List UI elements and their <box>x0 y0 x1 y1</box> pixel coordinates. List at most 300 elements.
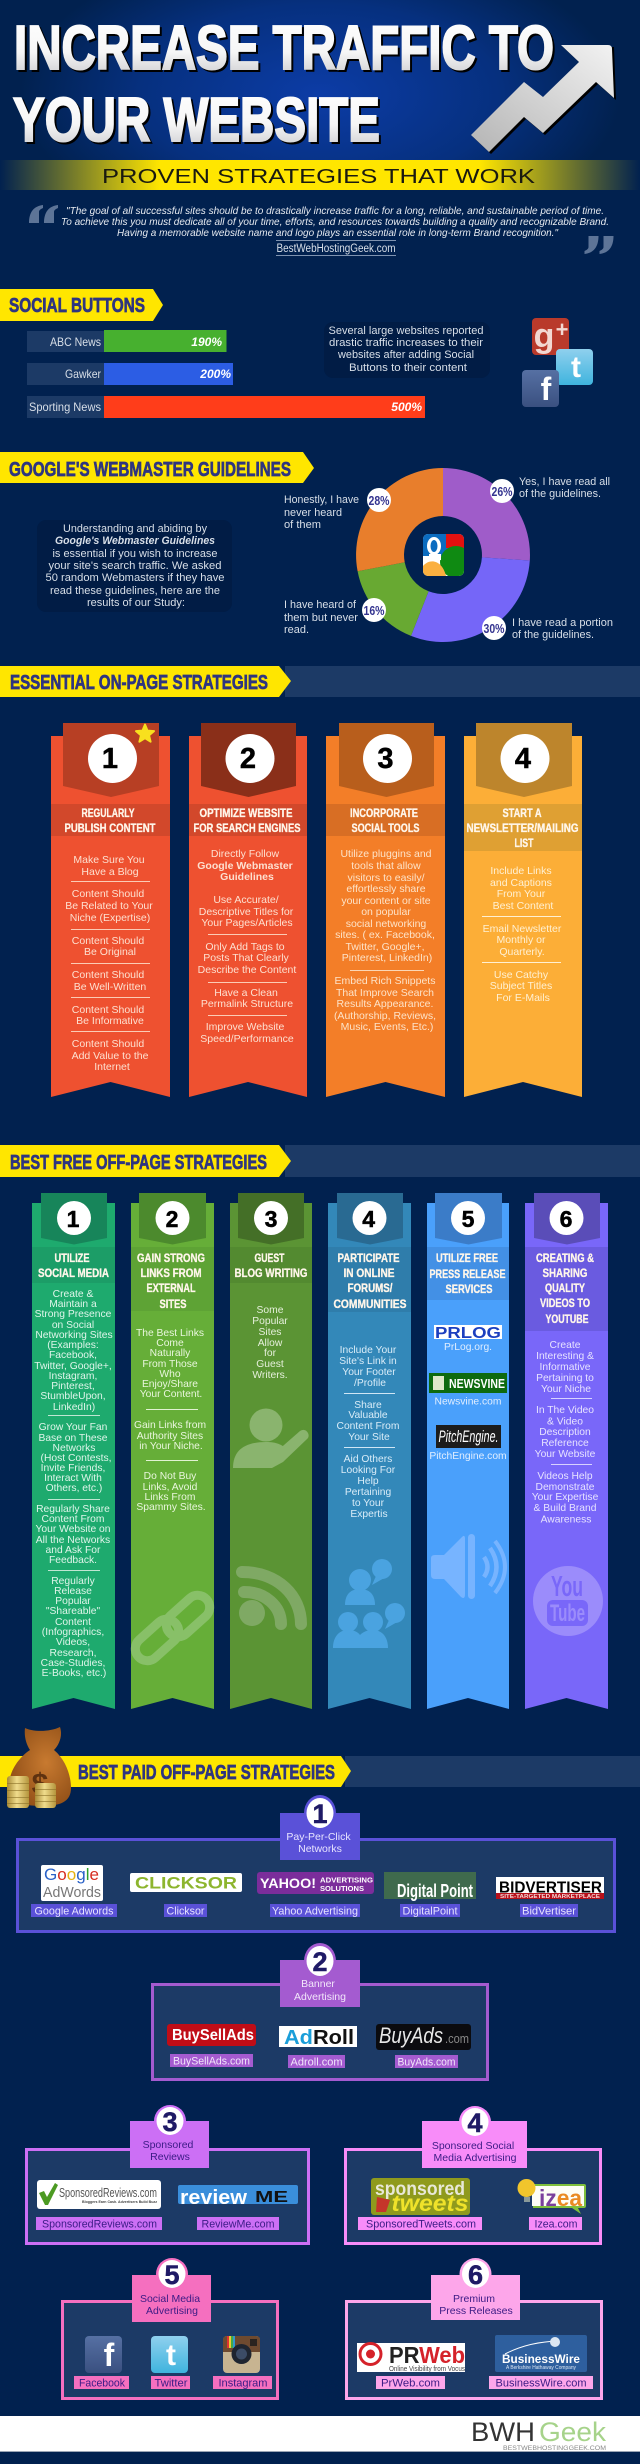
heading: best paid off-page strategies: BEST PAID OFF-PAGE STRATEGIES <box>78 1761 335 1784</box>
footer logo: Geek <box>539 2417 607 2447</box>
panel: on-page strategy 2: Describe the Content <box>198 964 296 976</box>
icon: closing quote mark <box>584 236 614 254</box>
panel: pay-per-click networks: 1 <box>312 1799 328 1829</box>
panel: on-page strategy 2: Speed/Performance <box>200 1033 294 1045</box>
panel: free strategy 2: Links, Avoid <box>143 1482 198 1493</box>
panel: sponsored reviews: 3 <box>162 2107 178 2137</box>
panel: free strategy 5: SERVICES <box>446 1282 492 1296</box>
panel: free strategy 1: Maintain a <box>49 1299 97 1310</box>
callout: guidelines intro: Google's Webmaster Guidelines <box>55 535 215 547</box>
panel: sponsored reviews: Sponsored <box>143 2139 194 2151</box>
quote source: BestWebHostingGeek.com <box>276 243 396 255</box>
bar chart: social buttons traffic: ABC News <box>50 335 101 349</box>
icon: person with pencil <box>233 1408 309 1468</box>
panel: on-page strategy 2: 2 <box>240 743 256 775</box>
panel: free strategy 1: Case-Studies, <box>41 1658 105 1669</box>
panel: free strategy 5 <box>427 1193 509 1709</box>
panel: free strategy 6: Interesting & <box>536 1351 594 1362</box>
panel: on-page strategy 1: Content Should <box>72 1038 144 1050</box>
panel: free strategy 6: YOUTUBE <box>546 1312 588 1326</box>
icon: google plus <box>532 317 569 355</box>
panel: free strategy 2: Links From <box>145 1492 195 1503</box>
subtitle bar: PROVEN STRATEGIES THAT WORK <box>102 165 535 188</box>
bubble: 26 percent: 26% <box>492 484 513 499</box>
panel: on-page strategy 1: Be Well-Written <box>74 981 146 993</box>
heading: essential on-page strategies <box>0 666 640 697</box>
icon: twitter <box>556 349 593 385</box>
icon: rising arrow <box>471 45 616 154</box>
panel: on-page strategy 3: (Authorship, Reviews, <box>334 1010 436 1022</box>
panel: sponsored social media advertising: SponsoredTweets.com <box>366 2218 476 2230</box>
panel: on-page strategy 4: Email Newsletter <box>483 923 562 935</box>
logo: reviewme <box>178 2185 298 2209</box>
panel: social media advertising: Facebook <box>79 2378 125 2390</box>
icon: chain link <box>130 1590 215 1666</box>
logo: izea: izea <box>539 2185 582 2211</box>
bubble: 26 percent <box>490 479 514 503</box>
logo: pitchengine: PitchEngine. <box>438 1427 498 1446</box>
panel: on-page strategy 1: Niche (Expertise) <box>70 912 150 924</box>
logo: adroll: AdRoll <box>284 2027 354 2049</box>
icon: instagram <box>223 2336 260 2373</box>
panel: on-page strategy 1: PUBLISH CONTENT <box>64 821 156 835</box>
panel: banner advertising: BuyAds.com <box>398 2056 456 2068</box>
callout: social buttons: Several large websites reported <box>328 325 484 337</box>
panel: free strategy 6: Your Expertise <box>532 1492 599 1503</box>
panel: free strategy 1: All the Networks <box>36 1535 110 1546</box>
panel: free strategy 1: SOCIAL MEDIA <box>38 1266 109 1280</box>
panel: free strategy 6: Description <box>539 1427 591 1438</box>
panel: free strategy 1: Regularly Share <box>36 1504 110 1515</box>
panel: free strategy 4: FORUMS/ <box>348 1281 393 1295</box>
panel: social media advertising: Advertising <box>146 2305 198 2317</box>
panel: free strategy 6: Pertaining to <box>536 1373 594 1384</box>
panel: free strategy 1: Content <box>55 1617 91 1628</box>
panel: on-page strategy 3: That Improve Search <box>336 987 434 999</box>
donut labels: Yes, I have read all <box>519 476 610 488</box>
panel: free strategy 1: 1 <box>67 1206 80 1232</box>
donut labels: Honestly, I have <box>284 494 359 506</box>
panel: free strategy 6 <box>525 1193 608 1709</box>
panel: free strategy 2: Spammy Sites. <box>136 1502 206 1513</box>
logo: google adwords: Google <box>44 1865 99 1884</box>
panel: on-page strategy 2: Use Accurate/ <box>213 894 279 906</box>
panel: free strategy 1: Pinterest, <box>51 1381 95 1392</box>
logo: google adwords: AdWords <box>43 1884 101 1901</box>
panel: free strategy 1: Content From <box>42 1514 104 1525</box>
panel: free strategy 4: Help <box>357 1476 379 1487</box>
panel: free strategy 1: (Examples: <box>47 1340 99 1351</box>
bar chart: social buttons traffic: Sporting News <box>29 400 101 414</box>
panel: free strategy 4: Content From <box>337 1421 399 1432</box>
panel: free strategy 6: VIDEOS TO <box>540 1296 590 1310</box>
panel: on-page strategy 3: social networking <box>346 918 426 930</box>
panel: free strategy 2: Who <box>159 1369 181 1380</box>
panel: on-page strategy 1 <box>51 723 170 1097</box>
icon: people talking <box>333 1559 405 1648</box>
panel: free strategy 3: Popular <box>252 1316 288 1327</box>
panel: on-page strategy 3: Music, Events, Etc.) <box>341 1021 433 1033</box>
panel: free strategy 3: BLOG WRITING <box>234 1266 308 1280</box>
icon: youtube: You <box>551 1571 583 1603</box>
title: YOUR WEBSITE <box>13 86 380 155</box>
panel: free strategy 6: Awareness <box>541 1514 591 1526</box>
panel: banner advertising <box>152 1943 488 2080</box>
bar chart: social buttons traffic: 200% <box>199 367 231 381</box>
panel: free strategy 2: Naturally <box>150 1348 191 1359</box>
bubble: 30 percent <box>482 616 506 640</box>
panel: on-page strategy 3: Pinterest, LinkedIn) <box>342 952 432 964</box>
logo: sponsored tweets <box>371 2178 470 2216</box>
heading: best free off-page strategies: BEST FREE OFF-PAGE STRATEGIES <box>10 1151 267 1174</box>
panel: on-page strategy 2: OPTIMIZE WEBSITE <box>200 806 292 820</box>
heading: essential on-page strategies: ESSENTIAL ON-PAGE STRATEGIES <box>10 671 268 694</box>
panel: on-page strategy 4: For E-Mails <box>496 992 550 1004</box>
panel: free strategy 4: IN ONLINE <box>344 1266 394 1280</box>
panel: banner advertising: Banner <box>301 1978 335 1990</box>
logo: izea <box>518 2179 586 2214</box>
bar chart: social buttons traffic: 500% <box>391 400 422 414</box>
quote text: "The goal of all successful sites should be to drastically increase traffic for a long, reliable, and sustainable period of time. <box>66 205 604 217</box>
panel: premium press releases: PrWeb.com <box>381 2378 440 2390</box>
panel: premium press releases: Press Releases <box>439 2305 513 2317</box>
panel: free strategy 1: Base on These <box>38 1433 108 1444</box>
title <box>13 14 556 157</box>
logo: pitchengine: PitchEngine.com <box>429 1451 507 1462</box>
panel: free strategy 2: in Your Niche. <box>139 1441 203 1452</box>
panel: free strategy 1 <box>32 1193 115 1709</box>
heading: social buttons: SOCIAL BUTTONS <box>9 294 145 317</box>
panel: on-page strategy 3: visitors to easily/ <box>347 872 425 884</box>
title: YOUR WEBSITE <box>15 88 382 157</box>
panel: free strategy 1: "Shareable" <box>46 1606 100 1617</box>
panel: premium press releases: BusinessWire.com <box>496 2378 586 2390</box>
panel: free strategy 6: Videos Help <box>537 1471 593 1482</box>
panel: on-page strategy 2: FOR SEARCH ENGINES <box>194 821 300 835</box>
bar chart: social buttons traffic: 190% <box>191 335 222 349</box>
panel: on-page strategy 4: 4 <box>515 743 531 775</box>
icon: twitter: t <box>166 2339 176 2372</box>
panel: free strategy 4 <box>328 1193 411 1709</box>
heading: best free off-page strategies <box>0 1145 640 1177</box>
panel: free strategy 6: Your Website <box>535 1449 596 1460</box>
icon: youtube <box>533 1566 603 1636</box>
panel: free strategy 3: Guest <box>256 1359 284 1370</box>
panel: social media advertising: 5 <box>164 2260 180 2290</box>
panel: free strategy 2: Gain Links from <box>134 1420 206 1431</box>
heading: best paid off-page strategies <box>0 1756 640 1787</box>
panel: free strategy 6: Your Niche <box>541 1384 591 1395</box>
panel: sponsored social media advertising: Izea.com <box>534 2218 578 2230</box>
panel: free strategy 1: Instagram, <box>49 1371 97 1382</box>
logo: yahoo advertising: ADVERTISING <box>320 1878 374 1884</box>
panel: on-page strategy 3: effortlessly share <box>346 883 426 895</box>
panel: free strategy 2: Your Content. <box>140 1389 202 1400</box>
panel: free strategy 2: 2 <box>166 1206 178 1232</box>
panel: free strategy 6: Create <box>550 1340 581 1351</box>
panel: free strategy 3 <box>230 1193 312 1709</box>
icon: google plus: + <box>556 317 568 342</box>
panel: social media advertising: Twitter <box>154 2378 188 2390</box>
panel: on-page strategy 3: Utilize pluggins and <box>340 848 432 860</box>
panel: free strategy 4: Your Footer <box>342 1367 396 1378</box>
panel: on-page strategy 2: Only Add Tags to <box>205 941 285 953</box>
panel: free strategy 2: Do Not Buy <box>144 1471 197 1482</box>
panel: on-page strategy 2: Have a Clean <box>214 987 278 999</box>
logo: newsvine: Newsvine.com <box>435 1396 501 1408</box>
panel: free strategy 6: & Video <box>547 1416 583 1428</box>
icon: twitter <box>151 2336 188 2373</box>
panel: free strategy 1: Videos, <box>56 1637 90 1648</box>
callout: guidelines intro: Understanding and abiding by <box>63 523 207 535</box>
icon: facebook <box>85 2336 122 2373</box>
icon: facebook <box>522 370 559 407</box>
panel: on-page strategy 3: Results Appearance. <box>337 998 433 1010</box>
panel: on-page strategy 4: NEWSLETTER/MAILING <box>466 821 578 835</box>
panel: on-page strategy 1: Content Should <box>72 935 144 947</box>
donut chart: webmaster survey <box>356 468 530 642</box>
icon: youtube: Tube <box>550 1600 585 1627</box>
panel: free strategy 4: Expertis <box>350 1509 388 1520</box>
panel: banner advertising: Advertising <box>294 1991 346 2003</box>
panel: on-page strategy 3: SOCIAL TOOLS <box>352 821 420 835</box>
panel: free strategy 2: GAIN STRONG <box>137 1251 205 1265</box>
donut labels: I have heard of <box>284 599 357 611</box>
panel: free strategy 2: LINKS FROM <box>140 1266 202 1280</box>
panel: free strategy 1: Release <box>54 1586 92 1597</box>
logo: reviewme: review <box>180 2187 247 2209</box>
panel: on-page strategy 4: Include Links <box>490 865 552 877</box>
quote text: Having a memorable website name and logo plays an essential role in long-term Brand recognition." <box>117 227 559 239</box>
donut labels <box>284 476 613 641</box>
callout: guidelines intro: is essential if you wish to increase <box>52 548 218 560</box>
panel: free strategy 2: The Best Links <box>136 1328 204 1339</box>
panel: free strategy 1: Networks <box>53 1443 95 1454</box>
panel: free strategy 4: COMMUNITIES <box>334 1297 406 1311</box>
bar chart: social buttons traffic <box>27 330 425 418</box>
panel: free strategy 4: Valuable <box>348 1410 388 1421</box>
panel: on-page strategy 3: Twitter, Google+, <box>345 941 425 953</box>
panel: on-page strategy 1: Add Value to the <box>72 1050 149 1062</box>
panel: on-page strategy 2: Directly Follow <box>211 848 280 860</box>
panel: on-page strategy 2: Your Pages/Articles <box>201 917 293 929</box>
logo: sponsored tweets: sponsored <box>375 2179 465 2200</box>
panel: free strategy 4: 4 <box>362 1206 375 1232</box>
logo: newsvine: NEWSVINE <box>449 1377 505 1391</box>
panel: premium press releases <box>346 2258 602 2398</box>
heading: social buttons <box>0 289 163 321</box>
panel: free strategy 6: Informative <box>540 1362 591 1373</box>
logo: businesswire: BusinessWire <box>502 2354 580 2366</box>
panel: free strategy 1: Facebook, <box>49 1350 97 1361</box>
callout: social buttons <box>324 322 490 378</box>
logo: newsvine <box>429 1373 507 1408</box>
logo: pitchengine <box>429 1425 507 1462</box>
icon: speaker <box>431 1534 505 1599</box>
bubble: 30 percent: 30% <box>484 621 505 636</box>
panel: free strategy 2: Come <box>156 1338 184 1349</box>
logo: bidvertiser: BIDVERTISER <box>499 1880 602 1896</box>
logo: businesswire: A Berkshire Hathaway Company <box>506 2365 576 2371</box>
donut labels: I have read a portion <box>512 617 613 629</box>
panel: on-page strategy 2: Improve Website <box>206 1021 284 1033</box>
panel: free strategy 4: PARTICIPATE <box>338 1251 400 1265</box>
panel: pay-per-click networks: Pay-Per-Click <box>286 1831 351 1843</box>
logo: yahoo advertising <box>257 1872 374 1894</box>
logo: buyads: .com <box>445 2031 469 2046</box>
panel: banner advertising: BuySellAds.com <box>173 2056 250 2068</box>
panel: free strategy 1: Networking Sites <box>35 1330 113 1341</box>
panel: on-page strategy 3 <box>326 723 445 1097</box>
panel: on-page strategy 1: Make Sure You <box>73 854 145 866</box>
panel: free strategy 6: QUALITY <box>545 1281 586 1295</box>
panel: free strategy 4: Aid Others <box>344 1454 392 1465</box>
panel: free strategy 4: to Your <box>352 1498 385 1509</box>
logo: yahoo advertising: YAHOO! <box>260 1875 316 1891</box>
panel: free strategy 6: Demonstrate <box>536 1482 595 1493</box>
logo: sponsoredreviews <box>37 2180 161 2209</box>
panel: free strategy 3: Sites <box>259 1327 281 1338</box>
panel: on-page strategy 4: From Your <box>497 888 546 900</box>
panel: pay-per-click networks: BidVertiser <box>522 1906 576 1918</box>
bar chart: social buttons traffic: Gawker <box>65 367 101 381</box>
logo: buysellads: BuySellAds <box>172 2027 254 2044</box>
panel: free strategy 1: E-Books, etc.) <box>42 1668 106 1679</box>
bubble: 16 percent <box>362 598 386 622</box>
panel: on-page strategy 2: Descriptive Titles for <box>199 906 294 918</box>
panel: pay-per-click networks: Yahoo Advertising <box>272 1906 358 1918</box>
panel: free strategy 2 <box>130 1193 215 1709</box>
panel: free strategy 4: /Profile <box>354 1378 386 1389</box>
heading: google's webmaster guidelines <box>0 452 314 483</box>
panel: free strategy 1: Regularly <box>51 1576 96 1587</box>
footer logo: BESTWEBHOSTINGGEEK.COM <box>503 2445 606 2452</box>
logo: prlog <box>434 1325 502 1353</box>
logo: prweb <box>357 2342 465 2373</box>
callout: guidelines intro <box>37 520 232 612</box>
donut labels: them but never <box>284 612 358 624</box>
bubble: 28 percent <box>367 488 391 512</box>
panel: free strategy 1: on Social <box>52 1320 94 1331</box>
panel: on-page strategy 4: START A <box>502 806 542 820</box>
icon: google plus: g <box>534 317 554 355</box>
logo: prweb: PRWeb <box>389 2342 465 2368</box>
panel: free strategy 5: PRESS RELEASE <box>430 1267 506 1281</box>
panel: pay-per-click networks: Networks <box>298 1843 342 1855</box>
panel: sponsored social media advertising <box>346 2106 600 2244</box>
quote text: To achieve this you must dedicate all of your time, efforts, and resources towards building a quality and recognizable Brand. <box>61 216 609 228</box>
panel: free strategy 2: Enjoy/Share <box>142 1379 198 1390</box>
panel: on-page strategy 3: tools that allow <box>351 860 421 872</box>
footer logo: BWH <box>471 2417 535 2447</box>
icon: money bag with coins: $ <box>32 1768 49 1801</box>
panel: free strategy 4: Include Your <box>340 1345 397 1356</box>
panel: free strategy 1: Invite Friends, <box>41 1463 105 1474</box>
panel: free strategy 5: UTILIZE FREE <box>436 1251 498 1265</box>
panel: free strategy 1: and Ask For <box>46 1545 101 1556</box>
icon: money bag with coins <box>7 1727 71 1808</box>
panel: pay-per-click networks: DigitalPoint <box>402 1906 458 1918</box>
bubble: 16 percent: 16% <box>364 603 385 618</box>
logo: clicksor: CLICKSOR <box>135 1874 237 1892</box>
panel: pay-per-click networks <box>18 1795 614 1932</box>
panel: on-page strategy 2: Permalink Structure <box>201 998 293 1010</box>
logo: google adwords <box>41 1865 103 1901</box>
panel: free strategy 3: Allow <box>258 1338 283 1349</box>
panel: on-page strategy 2: Google Webmaster <box>197 860 293 872</box>
callout: social buttons: websites after adding Social <box>337 349 474 361</box>
panel: social media advertising: Social Media <box>140 2293 200 2305</box>
logo: buysellads <box>167 2024 256 2046</box>
icon: facebook: f <box>104 2337 115 2373</box>
panel: free strategy 4: Pertaining <box>345 1487 391 1498</box>
panel: banner advertising: Adroll.com <box>290 2056 342 2068</box>
panel: free strategy 5: 5 <box>462 1206 475 1232</box>
panel: on-page strategy 4: Subject Titles <box>490 980 552 992</box>
icon: facebook: f <box>541 371 552 407</box>
logo: digital point <box>384 1872 476 1901</box>
callout: social buttons: drastic traffic increases to their <box>329 337 483 349</box>
panel: on-page strategy 1: Be Original <box>84 946 136 958</box>
donut labels: of them <box>284 519 321 531</box>
panel: social media advertising: Instagram <box>218 2378 268 2390</box>
panel: on-page strategy 4: Use Catchy <box>494 969 549 981</box>
panel: on-page strategy 1: Internet <box>94 1061 130 1073</box>
icon: google logo <box>423 534 464 576</box>
logo: sponsoredreviews: Bloggers Earn Cash. Advertisers Build Buzz <box>82 2199 157 2204</box>
panel: premium press releases: Premium <box>453 2293 495 2305</box>
panel: free strategy 1: Grow Your Fan <box>39 1422 108 1433</box>
panel: free strategy 1: StumbleUpon, <box>40 1391 106 1402</box>
donut labels: of the guidelines. <box>519 488 601 500</box>
panel: free strategy 4: Looking For <box>341 1465 396 1476</box>
panel: on-page strategy 4: and Captions <box>490 877 552 889</box>
panel: free strategy 3: Writers. <box>252 1370 288 1381</box>
callout: guidelines intro: 50 random Webmasters if they have <box>46 572 224 584</box>
panel: pay-per-click networks: Clicksor <box>166 1906 205 1918</box>
panel: pay-per-click networks: Google Adwords <box>34 1906 114 1918</box>
panel: on-page strategy 4: Best Content <box>493 900 553 912</box>
donut labels: never heard <box>284 507 342 519</box>
icon: star <box>136 724 154 742</box>
donut labels: read. <box>284 624 309 636</box>
panel: sponsored reviews <box>26 2105 308 2244</box>
panel: on-page strategy 4: Monthly or <box>496 934 546 946</box>
panel: sponsored social media advertising: Media Advertising <box>434 2152 517 2164</box>
panel: free strategy 4: Your Site <box>348 1432 390 1443</box>
footer <box>0 2416 640 2452</box>
logo: bidvertiser: SITE-TARGETED MARKETPLACE <box>500 1894 601 1900</box>
panel: on-page strategy 4 <box>464 723 582 1097</box>
subtitle bar <box>0 160 640 190</box>
panel: on-page strategy 4: Quarterly. <box>499 946 545 958</box>
logo: yahoo advertising: SOLUTIONS <box>320 1886 364 1893</box>
panel: free strategy 2: From Those <box>142 1359 198 1370</box>
bubble: 28 percent: 28% <box>368 493 390 508</box>
callout: guidelines intro: your site's search traffic. We asked <box>48 560 222 572</box>
panel: banner advertising: 2 <box>312 1947 328 1977</box>
panel: free strategy 6: 6 <box>560 1206 572 1232</box>
logo: sponsoredreviews: SponsoredReviews.com <box>59 2185 157 2200</box>
footer logo <box>471 2417 607 2452</box>
panel: free strategy 1: Create & <box>53 1289 93 1300</box>
heading: google's webmaster guidelines: GOOGLE'S WEBMASTER GUIDELINES <box>9 458 291 481</box>
panel: on-page strategy 3: INCORPORATE <box>350 806 418 820</box>
callout: social buttons: Buttons to their content <box>349 362 467 374</box>
panel: free strategy 1: Interact With <box>44 1473 102 1484</box>
panel: on-page strategy 1: REGULARLY <box>82 806 135 820</box>
panel: free strategy 1: LinkedIn) <box>53 1402 95 1413</box>
